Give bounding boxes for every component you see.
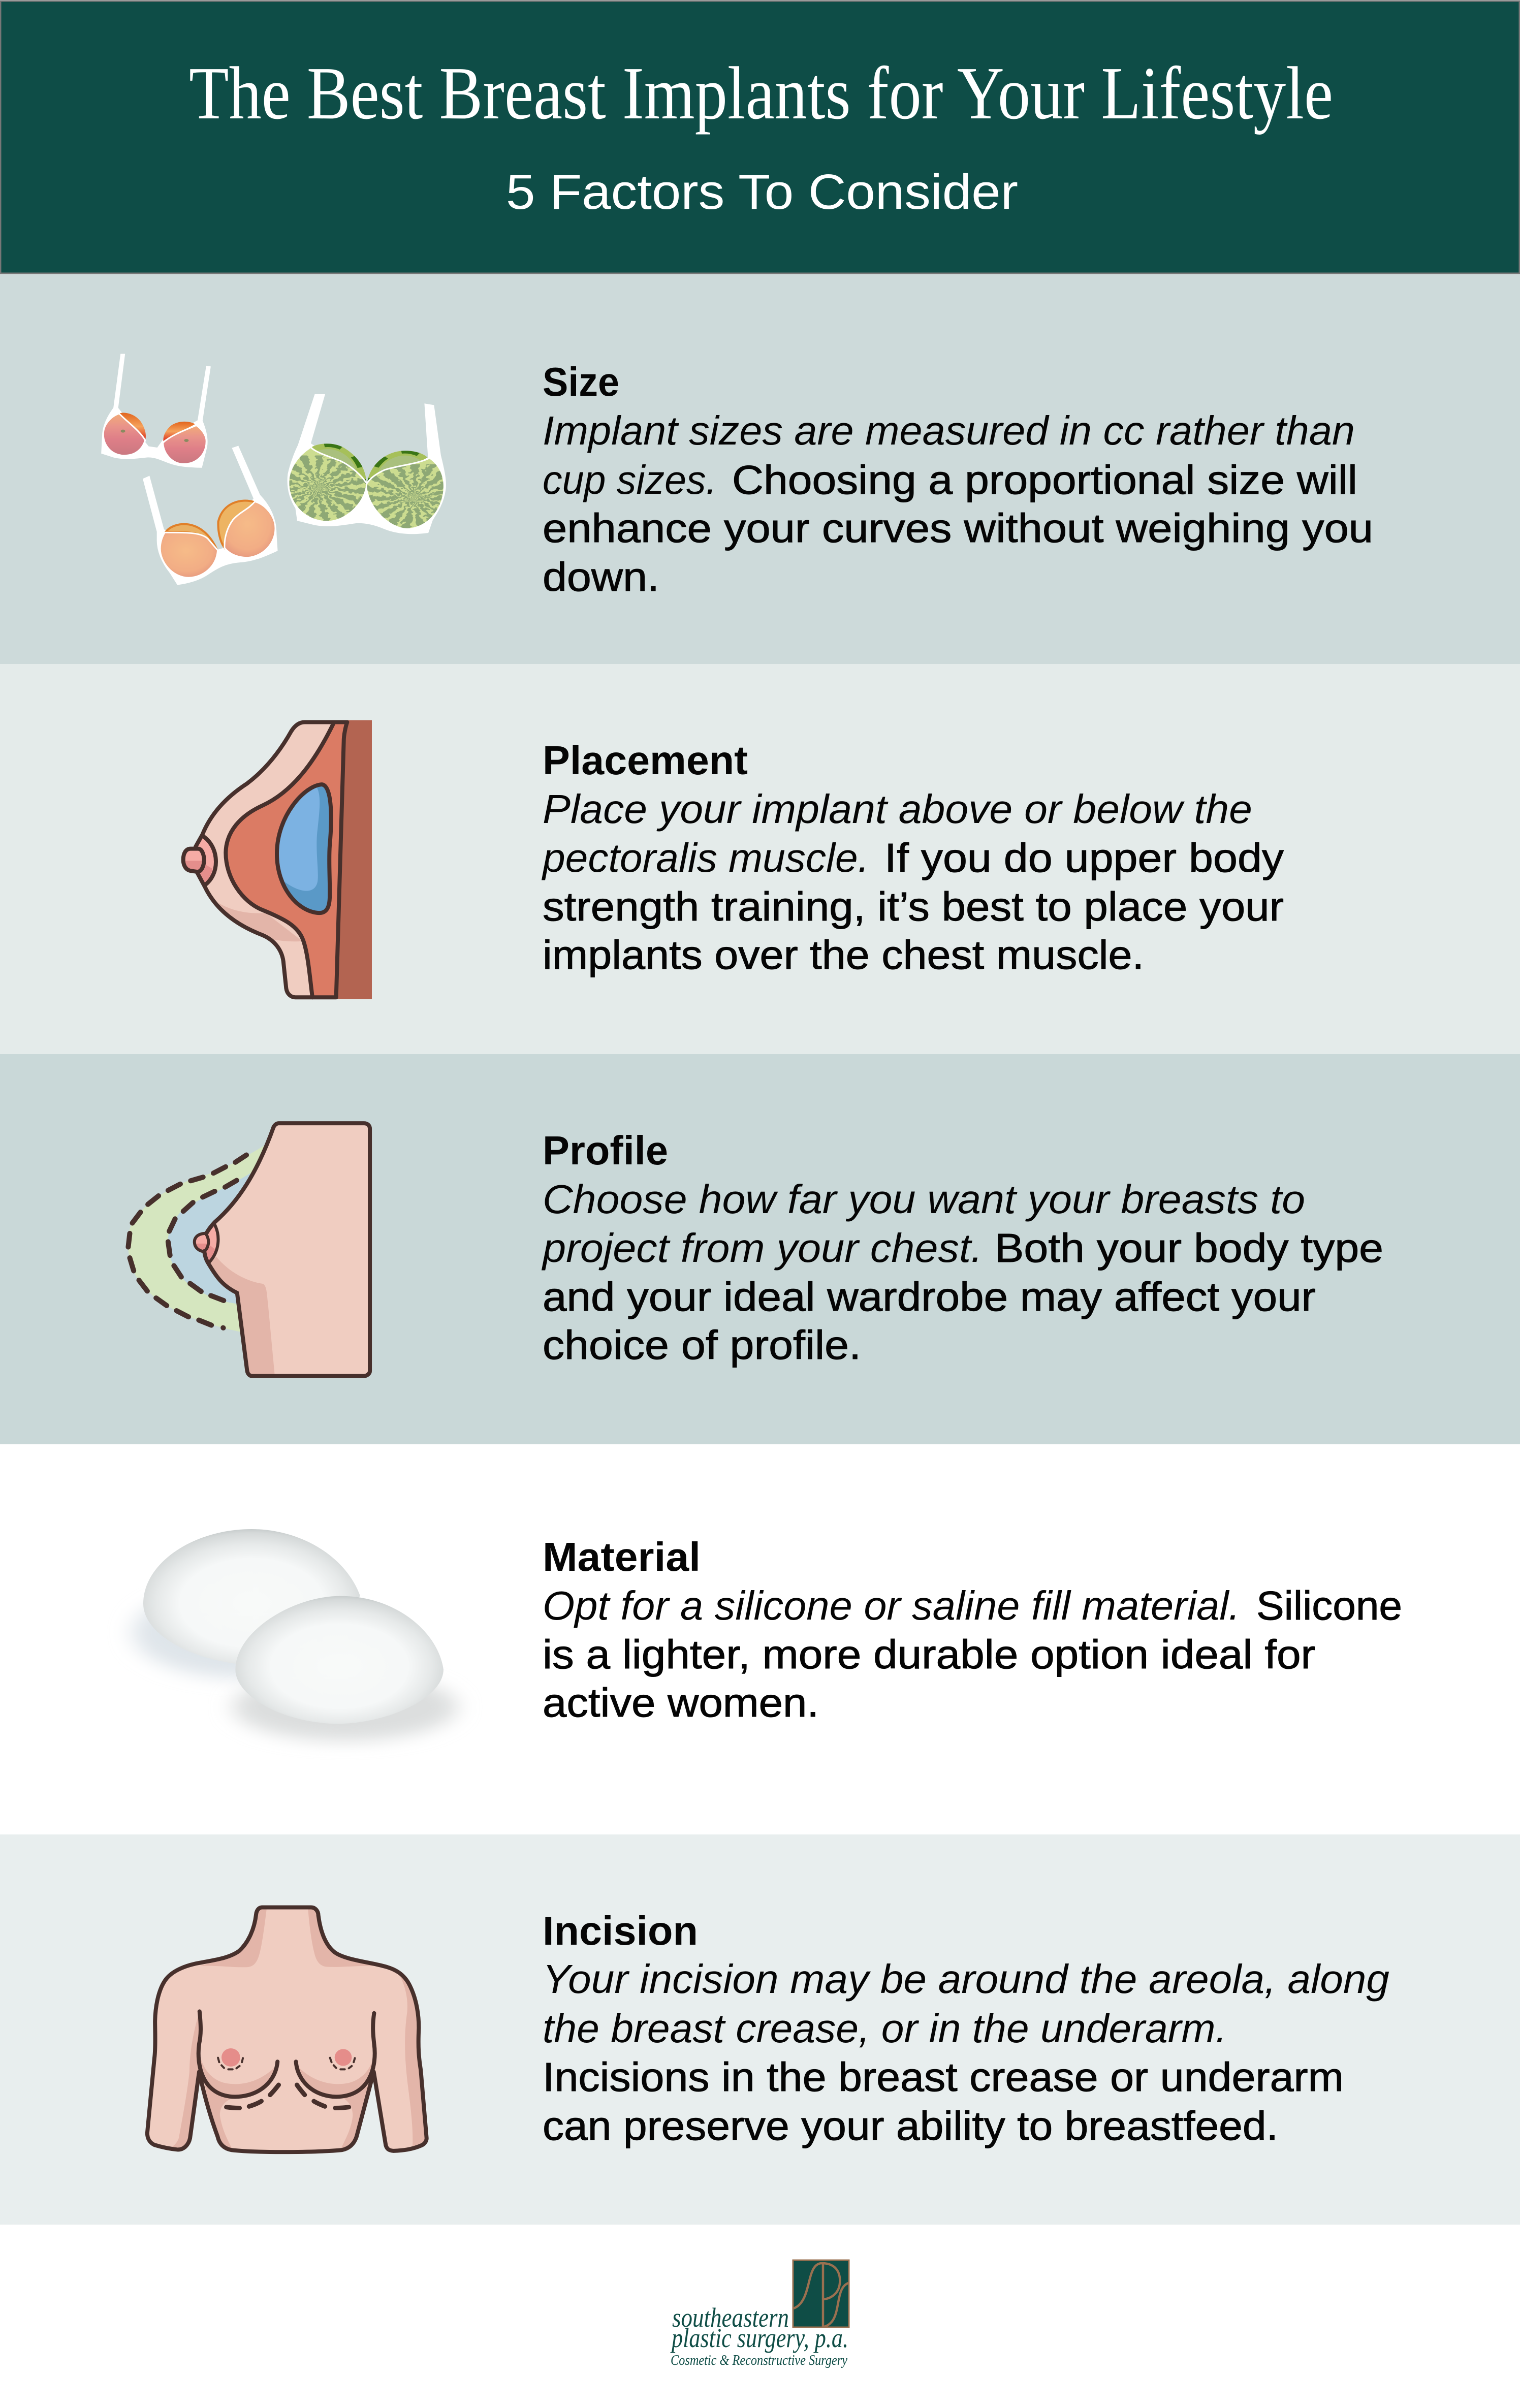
body: Choose how far you want your breasts to [543, 1177, 1305, 1222]
body: project from your chest. [542, 1225, 983, 1271]
icon: fruit in bras [102, 355, 455, 584]
body: Both your body type [995, 1225, 1383, 1271]
body [543, 1583, 1402, 1725]
body: and your ideal wardrobe may affect your [543, 1274, 1316, 1319]
areolas [221, 2048, 352, 2067]
header banner [1, 1, 1519, 273]
icon: silicone implants [133, 1529, 457, 1741]
apple bra [102, 355, 210, 467]
heading: Profile [543, 1128, 668, 1173]
areola incision dashes [218, 2058, 355, 2069]
body: Choosing a proportional size will [732, 457, 1357, 502]
body: enhance your curves without weighing you [543, 505, 1373, 551]
crease incision dashes [227, 2085, 349, 2108]
body: cup sizes. [543, 457, 717, 502]
body: Your incision may be around the areola, along [543, 1956, 1389, 2002]
dashed profile lines [128, 1155, 246, 1328]
heading: Incision [543, 1908, 698, 1953]
body: down. [543, 554, 659, 599]
watermelon bra [278, 395, 455, 533]
logo tagline: Cosmetic & Reconstructive Surgery [671, 2353, 847, 2368]
body: choice of profile. [543, 1322, 861, 1368]
body [543, 408, 1373, 599]
body: Implant sizes are measured in cc rather than [543, 408, 1355, 453]
body: the breast crease, or in the underarm. [543, 2006, 1227, 2051]
body: Incisions in the breast crease or underarm [543, 2054, 1344, 2100]
subtitle: 5 Factors To Consider [506, 164, 1018, 219]
text: placement [542, 738, 1284, 977]
body: strength training, it’s best to place your [543, 884, 1284, 929]
icon: torso with incision lines [147, 1907, 427, 2152]
panel: size [0, 274, 1520, 664]
panel: material [0, 1444, 1520, 1834]
heading: Placement [543, 738, 748, 783]
body: pectoralis muscle. [542, 835, 869, 880]
peach bra [144, 447, 277, 584]
text: profile [542, 1128, 1383, 1368]
title: The Best Breast Implants for Your Lifestyle [189, 52, 1333, 135]
panel: placement [0, 664, 1520, 1054]
body: Silicone [1256, 1583, 1402, 1628]
text: material [543, 1534, 1402, 1725]
body: implants over the chest muscle. [543, 932, 1144, 977]
heading: Material [543, 1534, 701, 1579]
logo wordmark line two: plastic surgery, p.a. [670, 2323, 848, 2353]
text: size [543, 359, 1373, 599]
panel: incision [0, 1834, 1520, 2225]
logo wordmark: southeastern [672, 2302, 789, 2333]
body: Place your implant above or below the [543, 786, 1252, 832]
body [543, 1956, 1389, 2148]
body: is a lighter, more durable option ideal for [543, 1632, 1315, 1677]
body: active women. [543, 1680, 819, 1725]
body [542, 1177, 1383, 1368]
logo mark [793, 2260, 849, 2327]
logo: southeastern plastic surgery [670, 2260, 849, 2368]
heading: Size [543, 359, 619, 404]
icon: implant placement cross-section [183, 720, 372, 999]
panel: profile [0, 1054, 1520, 1444]
body [542, 786, 1284, 977]
body: If you do upper body [884, 835, 1284, 880]
body: can preserve your ability to breastfeed. [543, 2103, 1278, 2148]
icon: breast profile [128, 1123, 370, 1376]
body: Opt for a silicone or saline fill material. [543, 1583, 1240, 1628]
text: incision [543, 1908, 1389, 2148]
